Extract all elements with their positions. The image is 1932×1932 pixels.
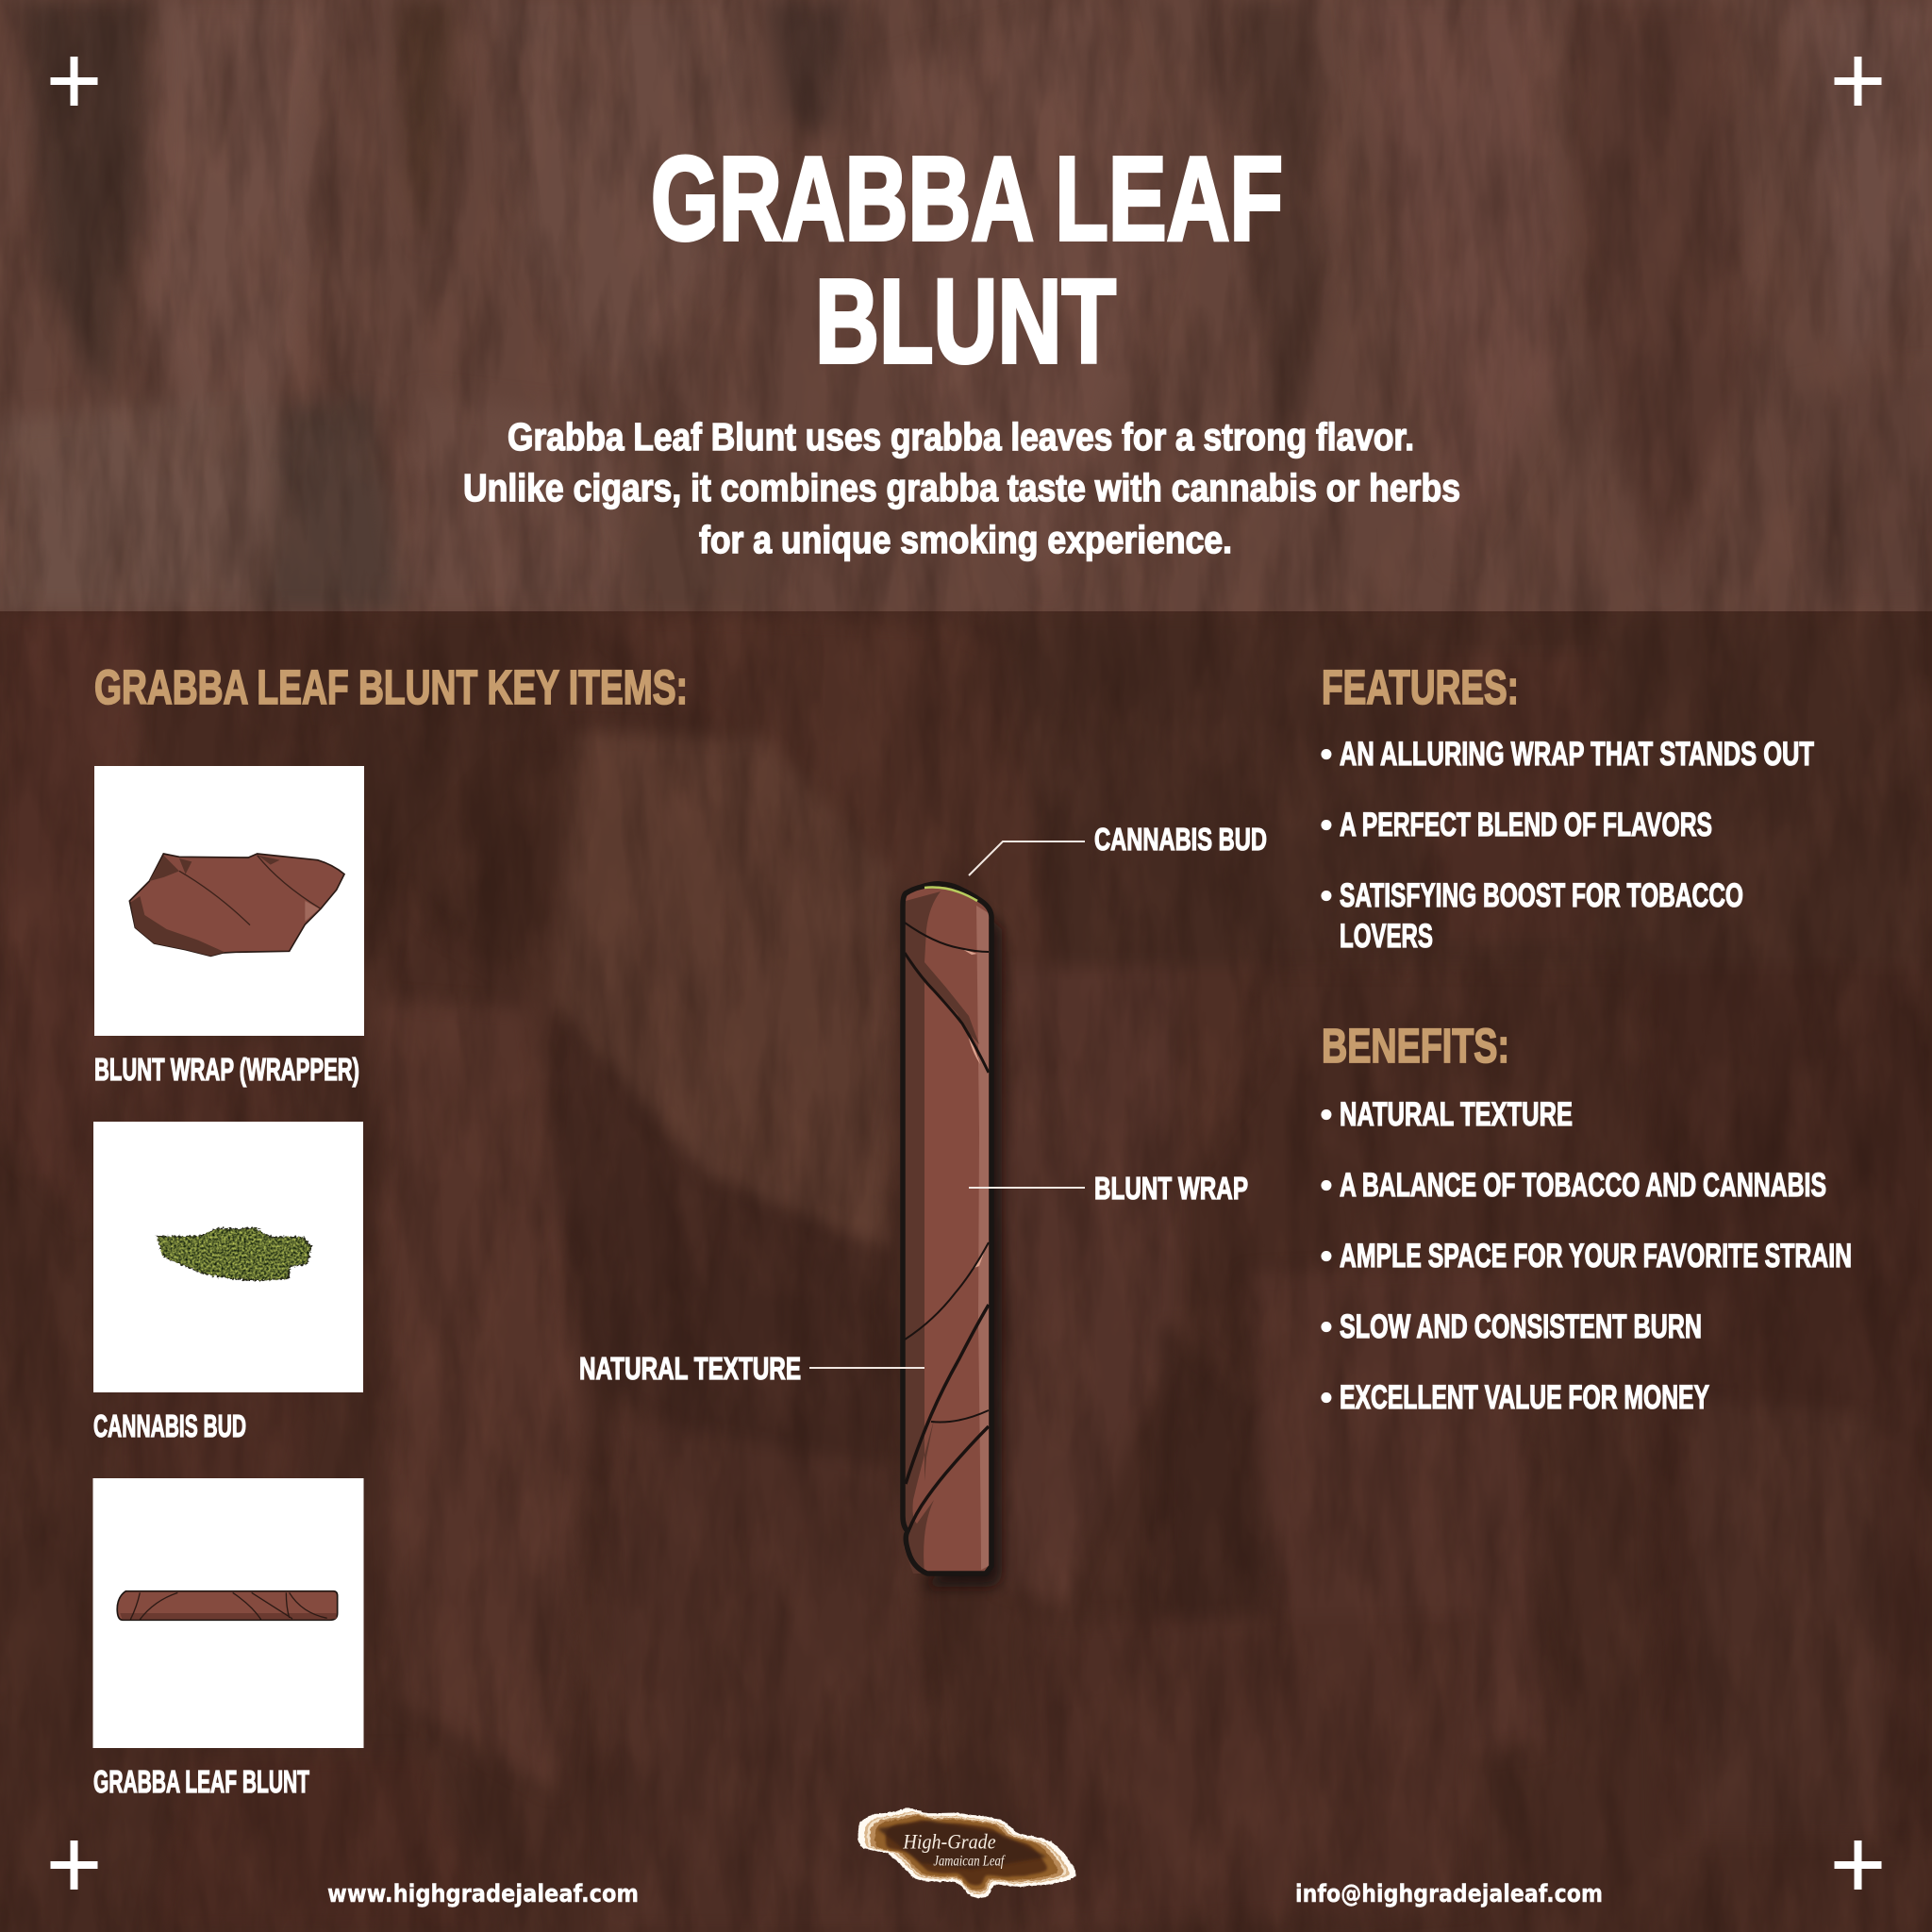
intro paragraph [463,415,1460,561]
benefits list: NATURAL TEXTURE [1340,1096,1573,1133]
feature list: A PERFECT BLEND OF FLAVORS [1340,807,1712,843]
label: CANNABIS BUD [93,1408,246,1443]
footer: email: info@highgradejaleaf.com [1295,1880,1603,1908]
intro paragraph: Unlike cigars, it combines grabba taste with cannabis or herbs [463,466,1460,509]
benefits list: • [1321,1380,1332,1416]
benefits list: • [1321,1239,1332,1274]
benefits list: SLOW AND CONSISTENT BURN [1340,1308,1702,1345]
icon: cannabis bud [158,1228,310,1280]
logo: High-Grade Jamaican Leaf: Jamaican Leaf [933,1853,1007,1869]
panel: cannabis bud item [93,1122,363,1443]
heading: features: FEATURES: [1322,660,1519,714]
benefits list: • [1321,1309,1332,1345]
feature list [1321,736,1814,955]
drop shadow [924,910,1002,1587]
benefits list: • [1321,1097,1332,1133]
label: GRABBA LEAF BLUNT [93,1764,309,1799]
callout: cannabis bud: CANNABIS BUD [1094,822,1267,857]
panel: grabba leaf blunt item [92,1478,364,1799]
wrap body [903,884,992,1574]
title [651,132,1283,388]
pink highlights [962,949,984,1269]
feature list: • [1321,737,1332,773]
icon: wrapper leaf [129,854,344,956]
title: GRABBA LEAF [651,132,1283,265]
title: BLUNT [815,255,1116,388]
feature list: SATISFYING BOOST FOR TOBACCO [1340,877,1743,914]
benefits list: EXCELLENT VALUE FOR MONEY [1340,1379,1709,1416]
right highlight [976,906,989,1570]
callout: natural texture: NATURAL TEXTURE [579,1351,801,1386]
benefits list: • [1321,1168,1332,1204]
heading: benefits: BENEFITS: [1322,1019,1509,1073]
callout: cannabis bud [969,822,1267,875]
shaded folds [904,891,979,1574]
intro paragraph: for a unique smoking experience. [699,518,1232,561]
logo: High-Grade Jamaican Leaf: High-Grade [902,1829,996,1853]
wrap outline [903,884,991,1574]
benefits list [1321,1096,1852,1416]
feature list: LOVERS [1340,918,1433,955]
footer: website: www.highgradejaleaf.com [327,1880,639,1908]
feature list: • [1321,808,1332,843]
central blunt illustration [903,884,1002,1587]
intro paragraph: Grabba Leaf Blunt uses grabba leaves for a strong flavor. [508,415,1414,458]
bud tip [924,888,977,901]
panel: benefits [1321,1019,1852,1416]
panel: blunt wrap item [94,766,364,1087]
feature list: • [1321,878,1332,914]
wrap creases [905,923,989,1531]
callout: blunt wrap: BLUNT WRAP [1094,1171,1248,1206]
logo: High-Grade Jamaican Leaf [859,1809,1074,1897]
icon: horizontal blunt [117,1591,338,1620]
panel: features [1321,660,1814,955]
heading: key items: GRABBA LEAF BLUNT KEY ITEMS: [94,660,688,714]
label: BLUNT WRAP (WRAPPER) [94,1052,359,1087]
